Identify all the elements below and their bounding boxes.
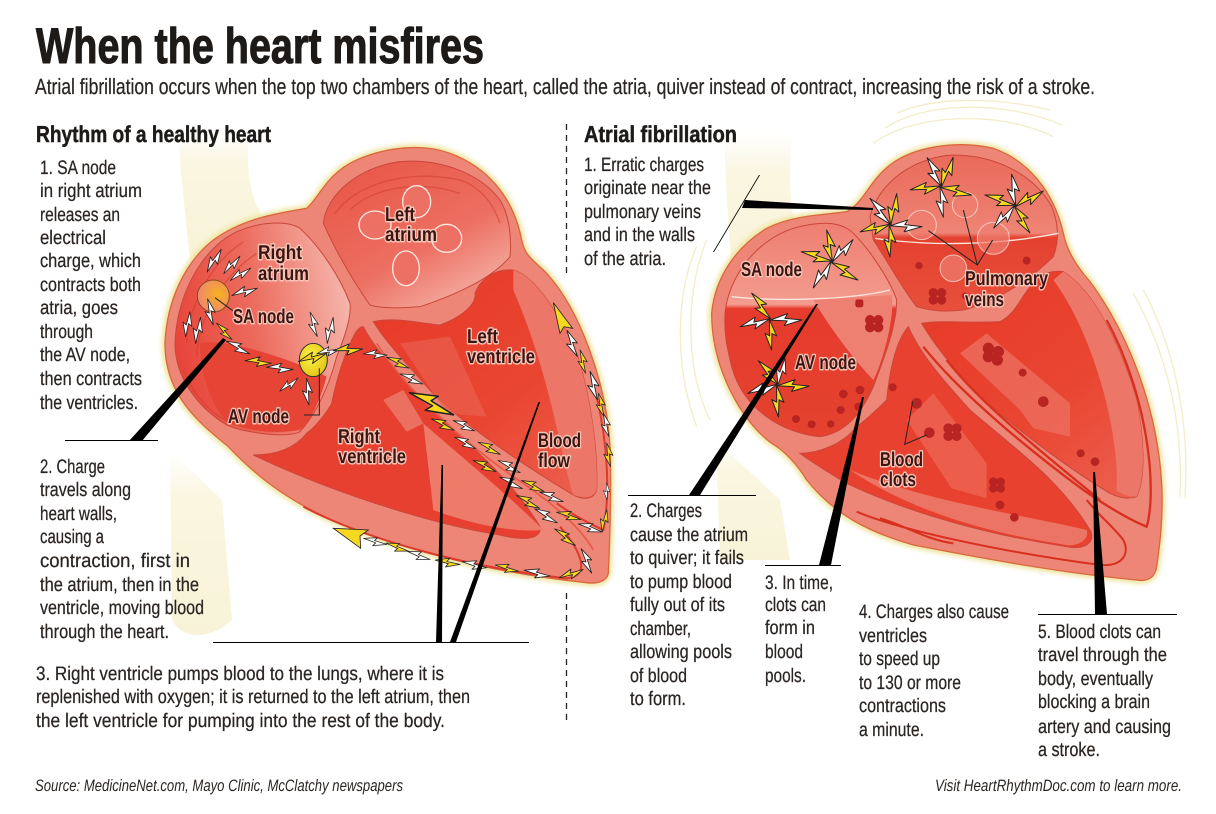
arrow: charge along bottom wall — [333, 528, 368, 548]
text block: fibrillation step 4: 4. Charges also cause — [859, 601, 1009, 623]
leader lines, healthy heart — [65, 338, 540, 643]
labels on fibrillating heart: AV node — [795, 352, 856, 374]
left ventricle chamber — [922, 271, 1143, 498]
text block: fibrillation step 2: to form. — [630, 688, 686, 710]
text block: healthy step 2: ventricle, moving blood — [40, 597, 204, 619]
text block: fibrillation step 1: of the atria. — [584, 248, 666, 270]
text block: fibrillation step 1: pulmonary veins — [584, 201, 701, 223]
text block: fibrillation step 2: chamber, — [630, 618, 691, 640]
text block: healthy step 1: in right atrium — [40, 180, 142, 202]
septum vessels — [923, 320, 1151, 527]
text block: fibrillation step 3: 3. In time, — [765, 572, 833, 594]
vibration arcs — [680, 100, 1186, 498]
labels on healthy heart: atrium — [258, 263, 309, 285]
text block: fibrillation step 4: to speed up — [859, 648, 940, 670]
left ventricle flow arrow — [400, 337, 487, 417]
labels on healthy heart: ventricle — [467, 346, 535, 368]
text block: healthy step 2: contraction, first in — [40, 550, 190, 572]
healthy heart illustration — [165, 148, 614, 583]
heart wall — [165, 148, 611, 583]
text block: fibrillation step 2: 2. Charges — [630, 500, 702, 522]
heart glow — [165, 148, 611, 583]
left ventricle pale wall — [1053, 272, 1143, 497]
text block: fibrillation step 2: fully out of its — [630, 594, 725, 616]
text block: healthy step 1: through — [40, 321, 93, 343]
text block: healthy step 3 — [36, 663, 470, 732]
text block: fibrillation step 2: to pump blood — [630, 571, 732, 593]
right ventricle chamber — [800, 327, 1092, 548]
text block: fibrillation step 3: blood — [765, 641, 803, 663]
text block: healthy step 2: through the heart. — [40, 621, 169, 643]
fibrillating heart illustration — [680, 100, 1186, 580]
text block: healthy step 1 — [40, 157, 142, 414]
left ventricle chamber — [373, 270, 597, 498]
av node pointer — [304, 368, 319, 415]
text block: healthy step 1: contracts both — [40, 274, 141, 296]
left atrium ribs — [335, 176, 500, 223]
text block: fibrillation step 1: 1. Erratic charges — [584, 154, 704, 176]
text block: healthy step 2: causing a — [40, 526, 104, 548]
vessels behind right heart — [716, 130, 800, 560]
av node — [299, 343, 327, 377]
erratic charge bursts — [739, 155, 1046, 417]
text block: fibrillation step 2: to quiver; it fails — [630, 547, 744, 569]
text block: fibrillation step 1: and in the walls — [584, 224, 695, 246]
text block: fibrillation step 3 — [765, 572, 833, 687]
vessels behind left heart — [170, 130, 262, 635]
text block: fibrillation step 3: clots can — [765, 594, 826, 616]
text block: fibrillation step 5: artery and causing — [1038, 716, 1171, 738]
sa node pointer — [215, 298, 233, 311]
text block: healthy step 3: replenished with oxygen; it is returned to the left atrium, then — [36, 686, 470, 708]
text block: fibrillation step 5: a stroke. — [1038, 739, 1100, 761]
text block: healthy step 1: the AV node, — [40, 344, 130, 366]
arrow: charge up heart wall — [553, 303, 573, 333]
bottom wall vessels — [857, 500, 1126, 565]
electrical charges — [180, 247, 614, 582]
text block: fibrillation step 4: contractions — [859, 695, 946, 717]
text block: fibrillation step 5: blocking a brain — [1038, 691, 1150, 713]
text block: fibrillation step 5 — [1038, 621, 1171, 761]
text block: fibrillation step 2: cause the atrium — [630, 524, 748, 546]
pulmonary vein openings, left atrium — [359, 186, 462, 286]
labels on fibrillating heart: veins — [965, 289, 1004, 311]
panel heading: atrial fibrillation: Atrial fibrillation — [584, 121, 737, 147]
title: When the heart misfires — [36, 18, 484, 74]
labels on healthy heart: Left — [467, 326, 498, 348]
labels on fibrillating heart: clots — [880, 469, 916, 491]
labels on fibrillating heart: SA node — [741, 259, 802, 281]
heart wall — [712, 145, 1162, 580]
right atrium ribs — [183, 242, 257, 423]
text block: healthy step 3: the left ventricle for pumping into the rest of the body. — [36, 710, 445, 732]
text block: fibrillation step 2 — [630, 500, 748, 710]
text block: fibrillation step 3: pools. — [765, 665, 806, 687]
left atrium chamber — [323, 161, 511, 308]
right atrium pale wedge — [813, 295, 892, 380]
labels on healthy heart: Left — [385, 204, 415, 226]
labels on healthy heart: Blood — [538, 430, 581, 452]
text block: fibrillation step 2: allowing pools — [630, 641, 732, 663]
text block: fibrillation step 4: to 130 or more — [859, 672, 961, 694]
pointers: blood clots — [905, 402, 927, 444]
text block: fibrillation step 5: body, eventually — [1038, 668, 1153, 690]
text block: healthy step 2: heart walls, — [40, 503, 117, 525]
labels on fibrillating heart — [741, 259, 1049, 491]
text block: healthy step 1: electrical — [40, 227, 106, 249]
sa node — [197, 280, 229, 312]
labels on fibrillating heart: Pulmonary — [965, 268, 1049, 290]
right atrium chamber — [175, 223, 350, 435]
right ventricle chamber — [253, 327, 540, 538]
text block: fibrillation step 1 — [584, 154, 711, 270]
text block: healthy step 1: atria, goes — [40, 297, 118, 319]
text block: healthy step 2: 2. Charge — [40, 456, 105, 478]
labels on healthy heart: atrium — [385, 224, 437, 246]
text block: fibrillation step 3: form in — [765, 617, 815, 639]
text block: fibrillation step 4: a minute. — [859, 719, 924, 741]
panel divider — [566, 124, 568, 722]
text block: healthy step 3: 3. Right ventricle pumps blood to the lungs, where it is — [36, 663, 444, 685]
labels on healthy heart: SA node — [233, 306, 294, 328]
right atrium chamber — [725, 223, 897, 437]
labels on healthy heart — [228, 204, 581, 472]
labels on healthy heart: ventricle — [338, 446, 406, 468]
labels on healthy heart: AV node — [228, 406, 289, 428]
right ventricle pale patch — [383, 390, 423, 432]
text block: healthy step 1: 1. SA node — [40, 157, 116, 179]
labels on healthy heart: Right — [258, 242, 302, 264]
text block: fibrillation step 4: ventricles — [859, 625, 927, 647]
left atrium fluid line — [875, 233, 1058, 244]
conduction fibres — [303, 397, 607, 578]
text block: fibrillation step 2: of blood — [630, 665, 687, 687]
panel heading: healthy heart: Rhythm of a healthy heart — [36, 121, 271, 147]
text block: fibrillation step 1: originate near the — [584, 177, 711, 199]
left ventricle flow arrow — [960, 333, 1070, 437]
right ventricle flow arrow — [423, 423, 543, 531]
text block: healthy step 2: the atrium, then in the — [40, 574, 199, 596]
source note: Source: MedicineNet.com, Mayo Clinic, McClatchy newspapers — [35, 777, 403, 795]
pointers: pulmonary veins — [928, 210, 993, 265]
right atrium lower red area — [200, 342, 327, 432]
septum inner stripe — [377, 343, 593, 550]
labels on healthy heart: Right — [338, 426, 380, 448]
text block: healthy step 2: travels along — [40, 479, 131, 501]
text block: fibrillation step 5: 5. Blood clots can — [1038, 621, 1161, 643]
right ventricle lower band — [850, 470, 1087, 545]
text block: healthy step 1: releases an — [40, 204, 120, 226]
labels on fibrillating heart: Blood — [880, 449, 923, 471]
left atrium chamber — [870, 155, 1057, 311]
right ventricle flow arrow — [907, 393, 987, 498]
leader lines, fibrillating heart — [628, 175, 1177, 615]
labels on healthy heart: flow — [538, 450, 570, 472]
right atrium fluid line — [732, 290, 890, 299]
text block: healthy step 1: then contracts — [40, 368, 142, 390]
left ventricle pale wall — [513, 270, 597, 497]
text block: healthy step 2 — [40, 456, 204, 643]
heart glow — [712, 145, 1162, 580]
text block: fibrillation step 5: travel through the — [1038, 644, 1167, 666]
text block: healthy step 1: the ventricles. — [40, 392, 138, 414]
blood clots — [792, 257, 1099, 522]
text block: healthy step 1: charge, which — [40, 250, 141, 272]
text block: fibrillation step 4 — [859, 601, 1009, 741]
pulmonary vein openings — [907, 192, 1009, 282]
